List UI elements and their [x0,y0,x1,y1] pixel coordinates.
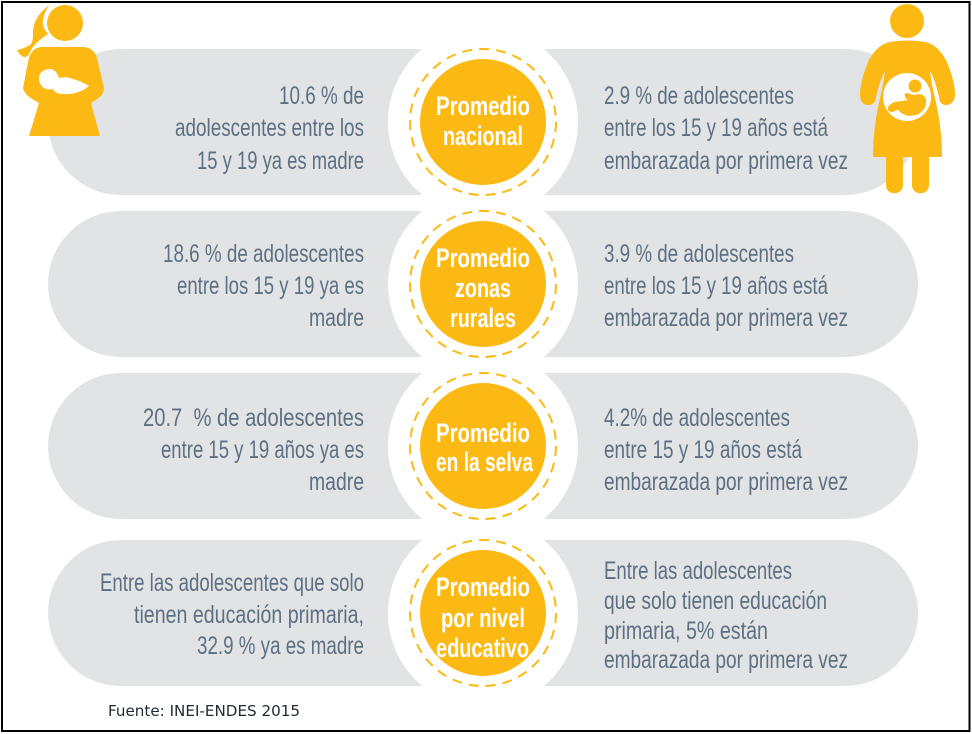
text: left nacional: 10.6 % de [279,82,364,110]
text: right nacional [604,82,848,175]
text: left educativo: tienen educación primaria, [134,601,364,629]
text: center educativo [436,572,530,663]
text: right selva: embarazada por primera vez [604,468,848,496]
text: left rural: 18.6 % de adolescentes [163,240,364,268]
text: left rural [163,240,364,332]
text: left nacional: adolescentes entre los [175,114,364,142]
text: right rural: embarazada por primera vez [604,304,848,332]
text: center selva: en la selva [436,447,534,477]
text: right selva: 4.2% de adolescentes [604,404,790,432]
source note: Fuente: INEI-ENDES 2015 [108,702,300,720]
text: center rural [436,243,530,333]
text: center rural: zonas [455,273,511,303]
text: right educativo [604,557,848,674]
text: left nacional [175,82,364,175]
text: center nacional: Promedio [436,91,530,121]
text: right selva [604,404,848,496]
panel: row 3 selva [48,372,918,520]
text: left rural: madre [309,304,364,332]
icon: mother with baby [17,5,104,136]
text: left educativo [100,569,364,660]
text: center nacional [436,91,530,151]
text: center rural: rurales [450,303,516,333]
text: center selva [436,418,534,477]
panel: row 4 nivel educativo [48,539,918,687]
text: right nacional: 2.9 % de adolescentes [604,82,794,110]
text: right rural [604,240,848,332]
text: left selva: madre [309,468,364,496]
text: center selva: Promedio [436,418,530,448]
text: left selva: 20.7 % de adolescentes [143,404,364,432]
text: right selva: entre 15 y 19 años está [604,436,802,464]
text: right educativo: Entre las adolescentes [604,557,792,585]
text: left selva: entre 15 y 19 años ya es [161,436,364,464]
text: right nacional: embarazada por primera vez [604,147,848,175]
text: center rural: Promedio [436,243,530,273]
text: right educativo: primaria, 5% están [604,617,768,645]
text: right rural: 3.9 % de adolescentes [604,240,794,268]
text: left nacional: 15 y 19 ya es madre [197,147,364,175]
text: center educativo: por nivel [441,603,525,633]
text: left rural: entre los 15 y 19 ya es [177,272,364,300]
text: right educativo: embarazada por primera vez [604,646,848,674]
panel: row 1 nacional [50,48,909,196]
panel: row 2 zonas rurales [48,210,918,358]
text: left educativo: Entre las adolescentes que solo [100,569,364,597]
text: center educativo: Promedio [436,572,530,602]
text: left selva [143,404,364,496]
text: center nacional: nacional [443,121,523,151]
text: center educativo: educativo [436,633,529,663]
text: right nacional: entre los 15 y 19 años está [604,114,828,142]
icon: pregnant woman [860,4,955,193]
text: left educativo: 32.9 % ya es madre [197,632,364,660]
text: right rural: entre los 15 y 19 años está [604,272,828,300]
text: right educativo: que solo tienen educación [604,587,827,615]
